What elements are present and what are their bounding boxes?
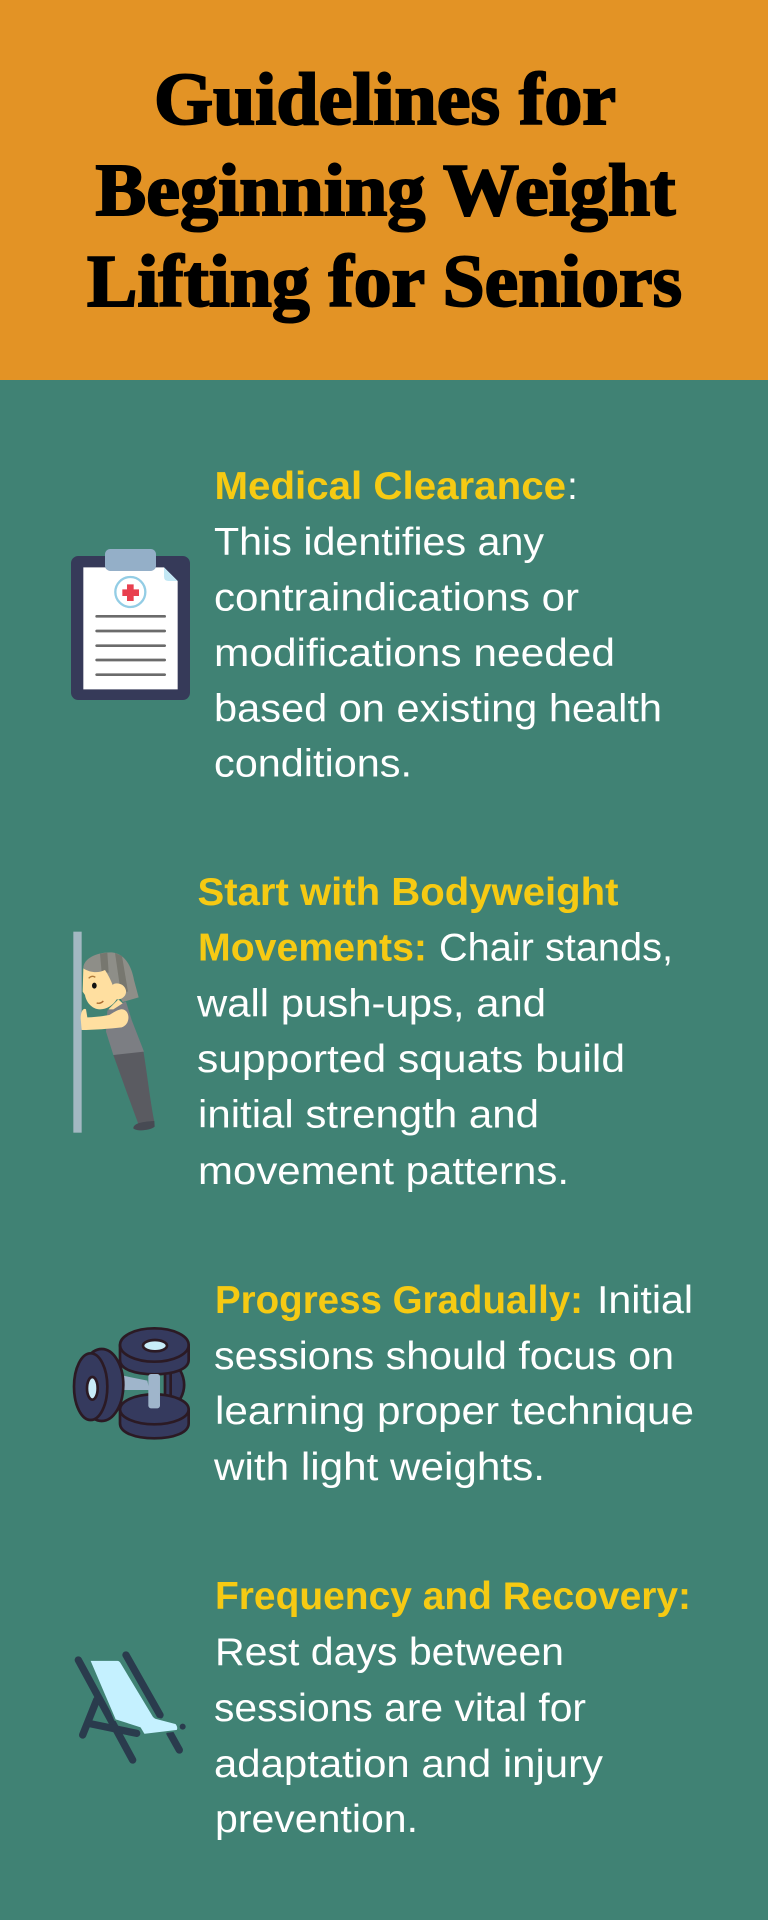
- text: medical clearance body: conditions.: [214, 743, 412, 786]
- text: bodyweight movements body: Chair stands,: [439, 927, 673, 970]
- text: progress gradually body: Initial: [597, 1279, 693, 1322]
- title: [87, 59, 682, 323]
- text: bodyweight movements body: supported squats build: [197, 1038, 625, 1081]
- text: progress gradually body: sessions should focus on: [214, 1335, 674, 1378]
- heading: start with bodyweight movements: [198, 871, 619, 970]
- text: progress gradually body: learning proper technique: [215, 1390, 694, 1433]
- title: Lifting for Seniors: [87, 241, 682, 323]
- title: Beginning Weight: [96, 150, 676, 232]
- text: progress gradually body: [213, 1279, 694, 1489]
- panel: medical clearance: [71, 465, 662, 786]
- heading: medical clearance: :: [567, 465, 578, 508]
- heading: medical clearance: Medical Clearance: [214, 465, 566, 508]
- text: frequency and recovery body: Rest days between: [215, 1631, 564, 1674]
- text: medical clearance body: contraindications or: [214, 577, 579, 620]
- text: frequency and recovery body: [214, 1631, 604, 1841]
- text: medical clearance body: modifications needed: [214, 632, 615, 675]
- heading: frequency and recovery: Frequency and Recovery:: [215, 1575, 691, 1618]
- heading: start with bodyweight movements: Movements:: [198, 927, 427, 970]
- panel: orange header: [0, 0, 768, 380]
- panel: frequency and recovery: [78, 1575, 691, 1841]
- panel: start with bodyweight movements: [73, 871, 673, 1193]
- text: bodyweight movements body: initial strength and: [198, 1094, 539, 1137]
- title: Guidelines for: [154, 59, 616, 141]
- text: medical clearance body: This identifies any: [214, 521, 545, 564]
- text: bodyweight movements body: wall push-ups, and: [196, 983, 546, 1026]
- icon: deck chair: [78, 1655, 186, 1760]
- icon: medical clipboard: [71, 549, 190, 700]
- heading: progress gradually: Progress Gradually:: [215, 1279, 583, 1322]
- panel: progress gradually: [74, 1279, 694, 1489]
- icon: senior doing wall push-up: [73, 932, 155, 1133]
- text: bodyweight movements body: [196, 927, 673, 1193]
- text: progress gradually body: with light weights.: [213, 1446, 545, 1489]
- text: frequency and recovery body: adaptation and injury: [214, 1743, 604, 1786]
- text: bodyweight movements body: movement patterns.: [198, 1150, 569, 1193]
- icon: dumbbells: [74, 1328, 189, 1438]
- text: frequency and recovery body: prevention.: [215, 1798, 418, 1841]
- text: frequency and recovery body: sessions are vital for: [214, 1687, 586, 1730]
- text: medical clearance body: based on existing health: [214, 688, 662, 731]
- heading: start with bodyweight movements: Start with Bodyweight: [198, 871, 619, 914]
- text: medical clearance body: [214, 521, 662, 786]
